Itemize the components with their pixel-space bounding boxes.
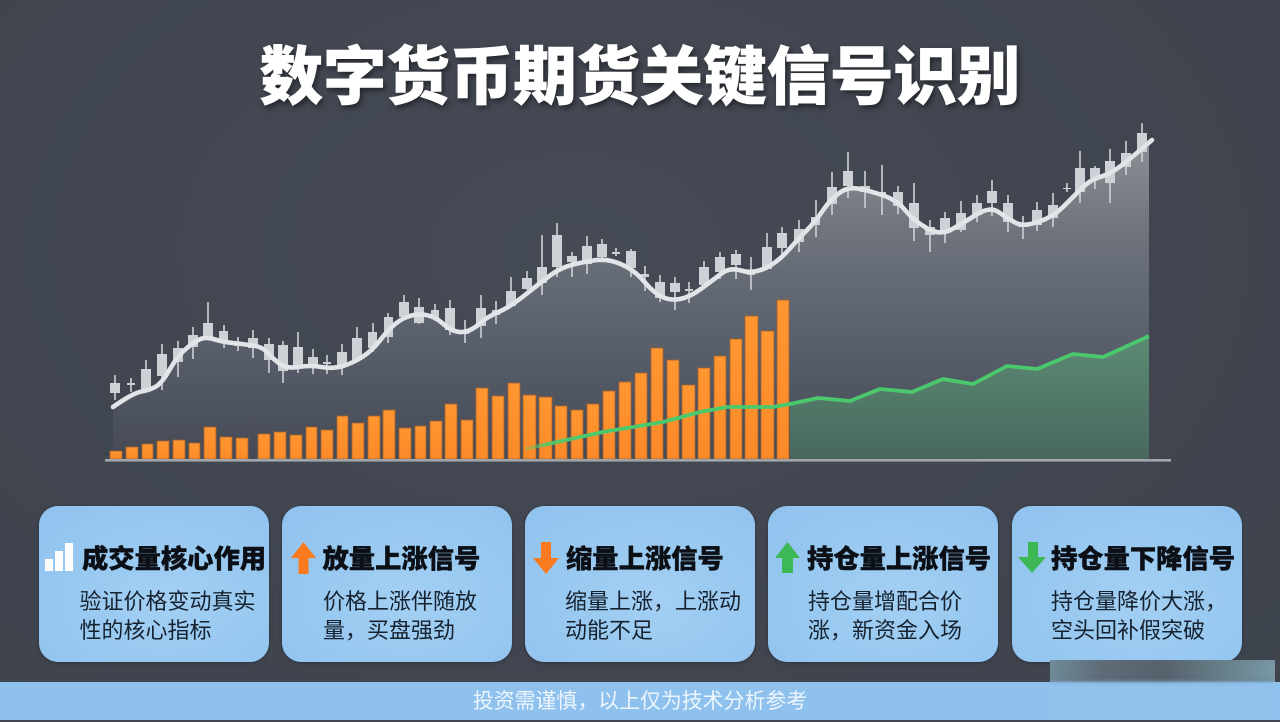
chart baseline axis (105, 459, 1171, 462)
card heading: 放量上涨信号 (322, 544, 480, 574)
card text: 空头回补假突破 (1051, 618, 1205, 643)
card text: 涨，新资金入场 (808, 618, 962, 643)
card text: 价格上涨伴随放 (323, 589, 477, 614)
card text (1051, 589, 1227, 643)
icon: orange up arrow (291, 542, 316, 574)
chart: price, volume and open interest (105, 123, 1171, 462)
card text: 缩量上涨，上涨动 (565, 589, 741, 614)
blurred watermark patch (1050, 660, 1275, 684)
footer disclaimer bar (0, 682, 1280, 720)
card text: 持仓量降价大涨， (1051, 589, 1227, 614)
icon: green down arrow (1018, 542, 1046, 573)
candlesticks (110, 123, 1147, 400)
panel: 持仓量上涨信号 (768, 506, 998, 662)
card text (565, 589, 741, 643)
icon: green up arrow (775, 542, 800, 573)
disclaimer text: 投资需谨慎，以上仅为技术分析参考 (473, 690, 807, 713)
panel: 放量上涨信号 (282, 506, 512, 662)
card text: 动能不足 (565, 618, 653, 643)
card text: 量，买盘强劲 (323, 618, 455, 643)
card heading: 成交量核心作用 (82, 544, 266, 574)
panel: 持仓量下降信号 (1012, 506, 1242, 662)
price area fill (113, 143, 1149, 459)
card text (323, 589, 477, 643)
icon: white volume bars (45, 543, 73, 571)
card text: 性的核心指标 (80, 618, 212, 643)
title: 数字货币期货关键信号识别 (260, 43, 1020, 113)
candle wicks (115, 123, 1142, 400)
card text: 持仓量增配合价 (808, 589, 962, 614)
panel: 成交量核心作用 (39, 506, 269, 662)
panel: 缩量上涨信号 (525, 506, 755, 662)
price trend line (113, 140, 1152, 407)
open interest area fill (790, 336, 1149, 459)
candle bodies (110, 133, 1147, 393)
card text: 验证价格变动真实 (80, 589, 256, 614)
open interest line (525, 336, 1149, 449)
volume bars (110, 300, 789, 459)
card heading: 持仓量下降信号 (1051, 544, 1235, 574)
card text (80, 589, 256, 643)
icon: orange down arrow (533, 542, 559, 574)
card text (808, 589, 962, 643)
card heading: 持仓量上涨信号 (807, 544, 991, 574)
card heading: 缩量上涨信号 (566, 544, 724, 574)
